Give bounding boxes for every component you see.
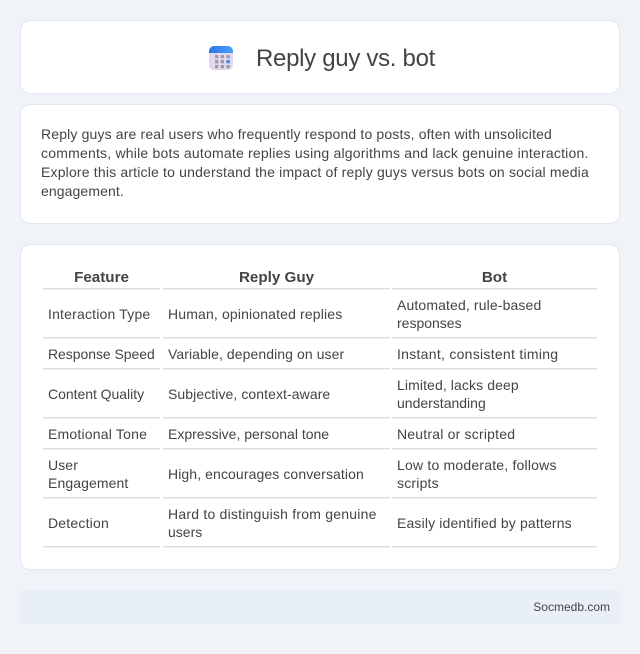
table: comparison: Emotional Tone <box>48 426 147 442</box>
table: comparison: scripts <box>397 475 439 491</box>
text block: description: Explore this article to understand the impact of reply guys versus bots on social media <box>41 164 589 180</box>
table: comparison: High, encourages conversation <box>168 466 364 482</box>
table: comparison: Variable, depending on user <box>168 346 344 362</box>
footer text: Socmedb.com <box>533 600 610 614</box>
icon: calendar <box>209 46 233 70</box>
table: comparison: Subjective, context-aware <box>168 386 330 402</box>
table: comparison: Limited, lacks deep <box>397 377 519 393</box>
table: comparison: Bot <box>482 269 507 286</box>
panel: comparison table card <box>20 244 620 570</box>
panel: title card <box>20 20 620 94</box>
table: comparison: Neutral or scripted <box>397 426 515 442</box>
table: comparison: Interaction Type <box>48 306 150 322</box>
table: comparison: Reply Guy <box>239 269 314 286</box>
table: comparison: Engagement <box>48 475 128 491</box>
table: comparison: users <box>168 524 202 540</box>
table: comparison: Expressive, personal tone <box>168 426 329 442</box>
text block: description <box>41 126 589 199</box>
table: comparison: Easily identified by patterns <box>397 515 572 531</box>
table: comparison: Content Quality <box>48 386 144 402</box>
table: comparison: Feature <box>74 269 129 286</box>
table: comparison: User <box>48 457 78 473</box>
table: comparison <box>43 269 597 548</box>
table: comparison: Detection <box>48 515 109 531</box>
text block: description: Reply guys are real users who frequently respond to posts, often with unsolicited <box>41 126 552 142</box>
table: comparison: Low to moderate, follows <box>397 457 557 473</box>
panel: description card <box>20 104 620 224</box>
text block: description: comments, while bots automate replies using algorithms and lack genuine interaction. <box>41 145 589 161</box>
table: comparison: Automated, rule-based <box>397 297 541 313</box>
table: comparison: Hard to distinguish from genuine <box>168 506 377 522</box>
text block: description: engagement. <box>41 183 124 199</box>
table: comparison: responses <box>397 315 462 331</box>
table: comparison: Human, opinionated replies <box>168 306 342 322</box>
table: comparison: Response Speed <box>48 346 155 362</box>
footer bar <box>20 590 620 624</box>
table: comparison: Instant, consistent timing <box>397 346 558 362</box>
table: comparison: understanding <box>397 395 486 411</box>
title: Reply guy vs. bot <box>256 45 435 72</box>
